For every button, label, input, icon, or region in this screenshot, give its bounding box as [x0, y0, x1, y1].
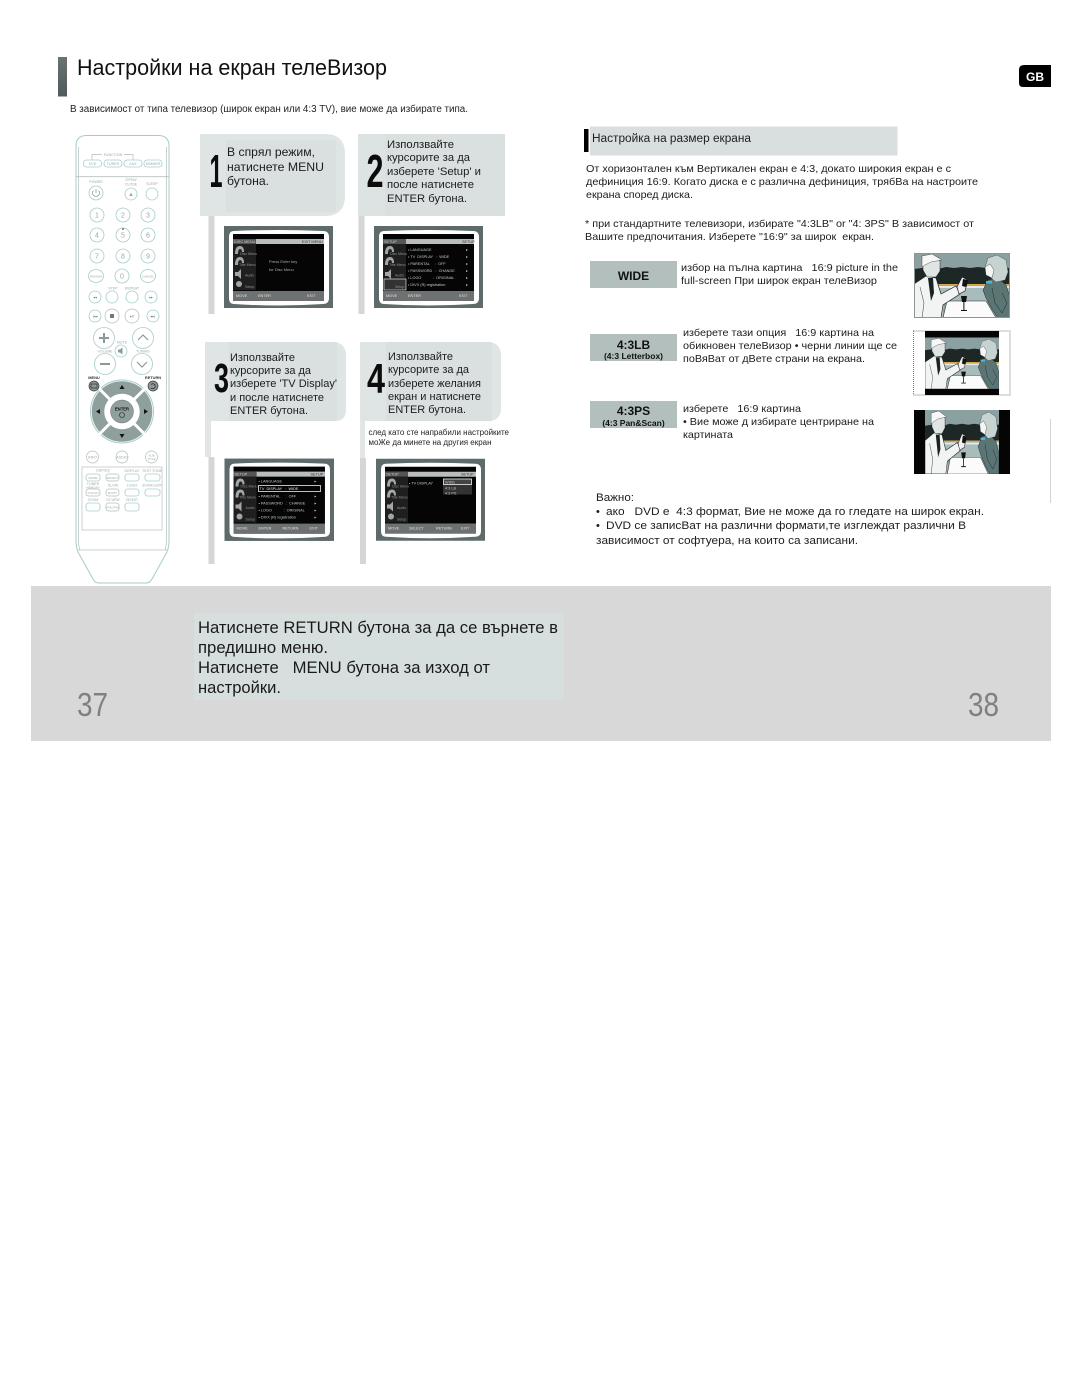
function button panel: DIGEST [126, 498, 138, 502]
step 1 connector post [208, 216, 214, 314]
step 1 menu screen: for Disc Menu [269, 267, 294, 272]
step 3 menu screen: SETUP [310, 472, 324, 476]
step 1 panel [200, 134, 345, 216]
4:3PS description: изберете 16:9 картина [683, 403, 801, 415]
step 3 menu screen: ▸ [314, 502, 316, 506]
step 3 panel: и после натиснете [230, 392, 324, 404]
step 2 menu screen: Disc Menu [390, 252, 407, 256]
step 2 menu screen: EXIT [459, 294, 468, 298]
step 3 menu screen: Title Menu [240, 496, 256, 500]
option label: 4:3PS: (4:3 Pan&Scan) [602, 418, 665, 428]
transport keys: ◂◂ [93, 296, 97, 300]
step 4 note: моЖе да минете на другия екран [368, 438, 492, 447]
info and audio keys: INFO [88, 456, 97, 460]
WIDE description [681, 262, 898, 287]
info and audio keys [86, 451, 158, 463]
transport keys: |◂◂ [93, 314, 97, 318]
function buttons: TUNER [107, 162, 120, 166]
step 3 panel: ENTER бутона. [230, 405, 308, 417]
return and menu note: предишно меню. [198, 638, 328, 657]
function button panel: MOIST [108, 491, 117, 495]
step 3 panel: Използвайте [230, 352, 295, 364]
step 2 panel: после натиснете [387, 179, 474, 191]
standard TV note [585, 218, 974, 243]
step 1 panel: 1 [210, 145, 222, 197]
step 4 panel: 4 [367, 355, 385, 402]
step 4 menu screen: Audio [397, 506, 406, 510]
step 2 menu screen: Title Menu [389, 263, 406, 267]
step 3 menu screen: RETURN [282, 526, 299, 530]
picture: pan and scan [914, 410, 1010, 474]
function button panel: TUNER [87, 482, 100, 486]
number keys: 4 [95, 232, 99, 240]
step 2 panel: курсорите за да [387, 152, 471, 164]
step 1 menu screen: Press Enter key [269, 259, 297, 264]
standard TV note: Вашите предпочитания. Изберете "16:9" за широк екран. [585, 231, 874, 243]
step 2 panel: изберете 'Setup' и [387, 166, 481, 178]
step 1 menu screen: Disc Menu [240, 252, 257, 256]
transport keys: ▸▸ [149, 296, 153, 300]
step 2 menu screen: ▸ [466, 248, 468, 252]
important notes [596, 492, 984, 547]
step 4 menu screen: 4:3 PS [445, 492, 457, 496]
important notes: ако DVD е 4:3 формат, Вие не може да го гледате на широк екран. [606, 506, 984, 518]
title bar marker [58, 57, 67, 96]
power row: OPEN/ [125, 178, 137, 182]
function button panel: DISPLAY [125, 469, 140, 473]
number keys: 1 [95, 212, 99, 220]
step 1 menu screen: MOVE [236, 294, 248, 298]
step 4 panel [360, 342, 501, 458]
step 1 panel: бутона. [227, 174, 269, 188]
step 2 menu screen: • TV DISPLAY : WIDE [408, 255, 450, 259]
step 2 menu screen: ▸ [466, 255, 468, 259]
step 3 connector post [208, 457, 214, 564]
4:3LB description: изберете тази опция 16:9 картина на [683, 327, 874, 339]
function button panel: LOGO [127, 484, 137, 488]
step 1 menu screen [224, 226, 333, 308]
step 3 menu screen: Disc Menu [240, 484, 257, 488]
step 4 menu screen: 4:3 LB [445, 486, 456, 490]
transport keys: STEP [108, 286, 118, 290]
step 3 menu screen: SETUP [234, 472, 248, 476]
number keys: CANCEL [142, 274, 154, 278]
4:3PS description: картината [683, 429, 733, 441]
menu and return keys: RETURN [145, 375, 161, 380]
badge: GB [1019, 65, 1051, 87]
step 2 menu screen: SETUP [462, 240, 475, 244]
step 3 menu screen: EXIT [310, 526, 319, 530]
step 3 menu screen: • LOGO : ORIGINAL [258, 508, 305, 512]
function button panel: ZOOM [88, 498, 98, 502]
step 1 panel: В спрял режим, [227, 145, 315, 159]
function button panel: P.SCAN [88, 491, 98, 495]
return and menu note: Натиснете MENU бутона за изход от [198, 658, 490, 677]
step 2 menu screen: • PARENTAL : OFF [408, 262, 446, 266]
step 2 menu screen: • DIVX (R) registration [408, 283, 445, 287]
number keys: 6 [146, 232, 150, 240]
step 4 panel: Използвайте [388, 351, 453, 363]
section heading [584, 126, 898, 156]
important notes: Важно: [596, 492, 634, 504]
step 2 menu screen: • LANGUAGE [408, 248, 432, 252]
step 4 connector post [360, 458, 366, 564]
info and audio keys: SUB [148, 454, 155, 458]
step 4 note: след като сте напрабили настройките [368, 428, 510, 437]
option label: 4:3LB: (4:3 Letterbox) [604, 351, 663, 361]
step 3 panel: курсорите за да [230, 365, 312, 377]
step 2 panel [358, 134, 505, 216]
transport keys: ▸II [130, 314, 134, 318]
step 4 menu screen: EXIT [461, 526, 470, 530]
function button panel: SLOW [108, 484, 119, 488]
power row: CLOSE [125, 182, 138, 186]
transport keys: REPEAT [125, 286, 140, 290]
option label: 4:3PS: 4:3PS [617, 404, 650, 418]
title: Настройки на екран телеВизор [77, 55, 387, 80]
option label: 4:3LB [590, 334, 677, 361]
bottom band [31, 586, 1051, 741]
subtitle: В зависимост от типа телевизор (широк екран или 4:3 TV), вие може да избирате типа. [70, 103, 468, 115]
step 4 menu screen: MOVE [388, 526, 400, 530]
step 2 panel: 2 [366, 145, 384, 197]
step 1 menu screen: ENTER [258, 294, 271, 298]
step 1 menu screen: Setup [245, 285, 254, 289]
function button panel: MEMORY [86, 486, 100, 490]
step 3 menu screen: Audio [246, 506, 255, 510]
step 4 note [368, 428, 510, 447]
step 2 menu screen: SETUP [384, 240, 397, 244]
step 3 menu screen: TV DISPLAY : WIDE [260, 487, 299, 491]
step 1 panel: натиснете MENU [227, 160, 324, 174]
option label: 4:3LB: 4:3LB [617, 338, 651, 352]
picture: wide [914, 253, 1010, 318]
option label: WIDE [590, 261, 677, 288]
step 4 panel: екран и натиснете [388, 391, 481, 403]
power row: ▲ [128, 192, 134, 198]
number keys: 5 [121, 232, 125, 240]
step 2 menu screen: ▸ [466, 283, 468, 287]
4:3LB description: поВяВат от дВете страни на екрана. [683, 353, 865, 365]
option label: WIDE: WIDE [618, 269, 649, 283]
number keys: 8 [121, 254, 125, 260]
menu and return keys: MENU [88, 375, 100, 380]
number keys: 9 [146, 254, 150, 260]
page number 38: 38 [968, 686, 999, 723]
step 4 menu screen: SETUP [386, 472, 399, 476]
power row: POWER [89, 180, 103, 184]
4:3LB description [683, 327, 897, 365]
step 1 menu screen: Title Menu [239, 263, 256, 267]
4:3PS description [683, 403, 874, 441]
step 4 menu screen: Setup [397, 518, 406, 522]
function button panel [82, 467, 163, 530]
step 3 menu screen: • PARENTAL : OFF [258, 494, 297, 498]
step 3 menu screen: Setup [246, 518, 255, 522]
function button panel: MODE [88, 476, 98, 480]
step 2 connector post [358, 216, 364, 314]
step 4 menu screen [376, 459, 485, 541]
function buttons: AUX [129, 162, 137, 166]
step 2 menu screen: ▸ [466, 276, 468, 280]
page number 37: 37 [77, 686, 108, 723]
step 4 menu screen: Title Menu [391, 496, 408, 500]
volume and tuning: MUTE [117, 340, 128, 344]
WIDE description: full-screen При широк екран телеВизор [681, 275, 877, 287]
step 3 menu screen: MOVE [236, 526, 248, 530]
4:3PS description: • Вие може д избирате центриране на [683, 416, 874, 428]
step 4 menu screen: SETUP [461, 472, 474, 476]
step 1 menu screen: DISC MENU [234, 240, 256, 244]
number keys: 0 [120, 274, 124, 280]
remote control [76, 136, 169, 583]
function button panel: NTSC/PAL [105, 506, 120, 510]
function button panel: EZ VIEW [106, 498, 120, 502]
step 3 panel: изберете 'TV Display' [230, 378, 337, 390]
number keys: 7 [95, 254, 99, 260]
step 3 menu screen: ▸ [314, 494, 316, 498]
info and audio keys: AUDIO [116, 456, 128, 460]
4:3LB description: обикновен телеВизор • черни линии ще се [683, 340, 897, 352]
step 1 menu screen: EXIT MENU [302, 240, 323, 244]
number keys [88, 208, 156, 283]
step 2 menu screen: ENTER [408, 294, 421, 298]
return and menu note [194, 613, 564, 700]
step 3 panel [205, 342, 346, 457]
function buttons: FUNCTION [104, 153, 123, 157]
picture: letterbox [914, 331, 1010, 395]
directional pad with enter [90, 380, 154, 443]
step 3 menu screen: ▸ [314, 508, 316, 512]
intro paragraph: дефиниция 16:9. Когато диска е с различна дефиниция, трябВа на настроите [586, 176, 978, 188]
step 3 menu screen: ▸ [314, 480, 316, 484]
step 2 menu screen: Audio [395, 274, 404, 278]
step 3 menu screen: • LANGUAGE [258, 480, 282, 484]
intro paragraph: екрана според диска. [586, 189, 693, 201]
step 3 menu screen [224, 459, 334, 541]
step 3 menu screen: ENTER [258, 526, 272, 530]
step 2 menu screen: Setup [395, 285, 404, 289]
function buttons: DVD [89, 162, 97, 166]
volume and tuning: TUNING [136, 350, 150, 354]
number keys: REMAIN [90, 274, 102, 278]
step 2 menu screen [374, 226, 483, 308]
step 2 menu screen: • LOGO : ORIGINAL [408, 276, 454, 280]
function buttons: DIMMER [146, 162, 161, 166]
step 4 menu screen: Disc Menu [392, 484, 409, 488]
step 4 panel: ENTER бутона. [388, 404, 466, 416]
step 4 menu screen: SELECT [409, 526, 424, 530]
transport keys [89, 286, 159, 323]
step 3 panel: 3 [214, 355, 229, 401]
step 4 menu screen: RETURN [436, 526, 452, 530]
intro paragraph: От хоризонтален към Вертикален екран е 4:3, докато широкия екран е с [586, 163, 951, 175]
badge: GB: GB [1026, 70, 1044, 84]
important notes: DVD се записВат на различни формати,те изглеждат различни В [606, 520, 966, 532]
return and menu note: настройки. [198, 678, 281, 697]
function button panel: SOUND EDIT [142, 484, 162, 488]
volume and tuning [94, 328, 154, 374]
standard TV note: * при стандартните телевизори, избирате "4:3LB" or "4: 3PS" В зависимост от [585, 218, 974, 230]
step 2 panel: ENTER бутона. [387, 193, 467, 205]
step 1 menu screen: Audio [245, 274, 254, 278]
transport keys: ▸▸| [151, 314, 155, 318]
option label: 4:3PS [590, 401, 677, 428]
step 4 menu screen: WIDE [445, 480, 455, 484]
menu and return keys [88, 375, 161, 391]
function buttons [84, 153, 162, 167]
step 3 menu screen: • DIVX (R) registration [258, 516, 296, 520]
step 2 panel: Използвайте [387, 139, 454, 151]
step 4 panel: изберете желания [388, 378, 481, 390]
power row [89, 178, 158, 200]
important notes: • [596, 506, 600, 518]
volume and tuning: VOLUME [97, 350, 113, 354]
step 4 panel: курсорите за да [388, 364, 470, 376]
intro paragraph [586, 163, 978, 201]
function button panel: TEST TONE [142, 469, 163, 473]
directional pad with enter: ENTER [115, 406, 129, 412]
info and audio keys: TITLE [147, 457, 156, 461]
important notes: • [596, 520, 600, 532]
WIDE description: избор на пълна картина 16:9 picture in the [681, 262, 898, 274]
step 3 menu screen: • PASSWORD : CHANGE [258, 502, 306, 506]
function button panel: EFFECT [107, 476, 118, 480]
section heading: Настройка на размер екрана [592, 133, 752, 145]
step 3 menu screen: ▸ [314, 516, 316, 520]
step 2 menu screen: MOVE [386, 294, 398, 298]
important notes: зависимост от софтуера, на които са записани. [596, 535, 858, 547]
number keys: 2 [121, 212, 125, 220]
power row: SLEEP [146, 182, 158, 186]
number keys: 3 [146, 212, 150, 220]
step 2 menu screen: ▸ [466, 269, 468, 273]
step 2 menu screen: • PASSWORD : CHANGE [408, 269, 455, 273]
step 2 menu screen: ▸ [466, 262, 468, 266]
return and menu note: Натиснете RETURN бутона за да се върнете в [198, 618, 558, 637]
step 1 menu screen: EXIT [307, 294, 316, 298]
step 4 menu screen: • TV DISPLAY [409, 482, 433, 486]
function button panel: DSP/EQ [96, 468, 110, 472]
